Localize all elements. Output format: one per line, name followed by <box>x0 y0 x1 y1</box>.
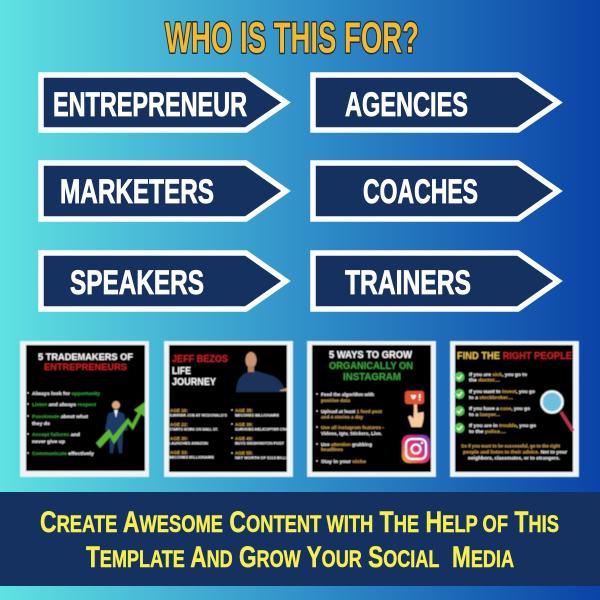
bullet list: Videos, Igtv, Stickers, Live. <box>321 431 382 436</box>
bullet list: Use all instagram features - <box>321 425 385 430</box>
closing paragraph: people and listen to their advice. Not to your <box>463 450 567 454</box>
timeline columns: AGE 39: <box>235 422 253 427</box>
panel heading <box>38 352 133 373</box>
panel heading: FIND THE RIGHT PEOPLE <box>457 351 572 362</box>
bullet list: Always look for opportunity <box>32 391 100 397</box>
arrow: agencies <box>313 75 558 130</box>
timeline columns: AGE 22: <box>170 422 188 427</box>
icon: notification bubble with tapping hand <box>405 391 424 427</box>
arrow: trainers: TRAINERS <box>345 264 471 302</box>
bullet list: Stay in your niche <box>321 459 367 464</box>
timeline columns: AGE 16: <box>170 408 188 413</box>
timeline columns: LAUNCHES AMAZON <box>169 442 208 446</box>
statements list: If you want to invest, you go <box>469 389 535 394</box>
bullet list: Passionate about what <box>32 414 88 420</box>
timeline columns: STARTS WORK ON WALL ST. <box>169 428 218 432</box>
portrait <box>236 352 287 392</box>
panel: find the right people <box>450 341 579 477</box>
timeline columns: AGE 33: <box>170 450 188 455</box>
statements list: to the police.... <box>469 429 506 434</box>
closing paragraph: neighbors, classmates, or to strangers. <box>468 456 560 460</box>
panel heading: INSTAGRAM <box>343 372 401 383</box>
statements list <box>469 372 536 434</box>
bullet list: Upload at least 1 feed post <box>321 409 383 414</box>
timeline columns <box>169 408 293 460</box>
closing paragraph: So if you want to be successful, go to the right <box>461 444 560 448</box>
bullet list: and 4 stories a day <box>321 414 364 420</box>
timeline columns: SUMMER JOB AT MCDONALD'S <box>169 414 228 418</box>
panel heading: JOURNEY <box>172 377 216 388</box>
bullet list: headlines <box>321 447 344 452</box>
bullet list: Use attention grabbing <box>321 442 372 447</box>
title: WHO IS THIS FOR? <box>165 14 419 62</box>
icon: magnifying glass <box>542 392 573 431</box>
panel heading: LIFE <box>172 366 191 377</box>
timeline columns: BECOMES BILLIONAIRE <box>235 414 280 418</box>
panel heading: ENTREPRENEURS <box>44 362 127 373</box>
panel: Jeff Bezos life journey <box>164 341 293 477</box>
bullet list <box>316 392 385 464</box>
banner text: CREATE AWESOME CONTENT WITH THE HELP OF THIS <box>40 506 559 539</box>
bullet list <box>27 391 100 457</box>
bullet list: Listen and always respect <box>32 402 96 408</box>
panel heading: 5 TRADEMAKERS OF <box>38 352 133 363</box>
arrow: entrepreneur: ENTREPRENEUR <box>53 86 247 124</box>
banner text <box>40 506 559 574</box>
icon: businessman <box>105 400 128 453</box>
timeline columns: AGE 35: <box>235 408 253 413</box>
bottom banner <box>0 492 600 586</box>
timeline columns: NET WORTH OF $113 BILLION <box>235 456 293 460</box>
arrow: marketers: MARKETERS <box>60 173 214 211</box>
closing paragraph <box>461 444 567 460</box>
timeline columns: BECOMES MILLIONAIRE <box>169 456 215 460</box>
panel heading: ORGANICALLY ON <box>329 361 413 372</box>
panel heading: 5 WAYS TO GROW <box>329 350 413 361</box>
arrow: marketers <box>41 163 286 219</box>
panel heading: JEFF BEZOS <box>172 354 228 365</box>
bullet list: never give up <box>32 439 65 445</box>
timeline columns: AGE 49: <box>235 436 253 441</box>
timeline columns: BUYS WASHINGTON POST <box>235 442 285 446</box>
timeline columns: AGE 30: <box>170 436 188 441</box>
bullet list: Feed the algorithm with <box>321 392 374 397</box>
statements list: the doctor.... <box>469 378 500 382</box>
arrow: coaches: COACHES <box>363 173 478 211</box>
check icons <box>454 372 464 433</box>
banner text: TEMPLATE AND GROW YOUR SOCIAL MEDIA <box>86 541 514 574</box>
statements list: If you are in trouble , you go <box>469 423 536 428</box>
statements list: If you have a case, you go <box>469 406 530 411</box>
bullet list: Accept failures and <box>32 432 80 438</box>
panel: 5 ways to grow on Instagram <box>307 341 436 477</box>
arrow: speakers <box>41 253 286 309</box>
timeline columns: AGE 55: <box>235 450 253 456</box>
icon: green growth arrow <box>96 402 145 448</box>
arrow: coaches <box>313 163 558 219</box>
arrow: entrepreneur <box>41 75 286 130</box>
panel heading <box>172 354 228 388</box>
bullet list: Communicate effectively <box>32 451 94 457</box>
statements list: to a stockbroker.... <box>469 395 513 400</box>
statements list: If you are sick, you go to <box>469 372 527 377</box>
arrow: speakers: SPEAKERS <box>70 264 204 302</box>
statements list: to a lawyer... <box>469 412 500 417</box>
icon: Instagram logo <box>402 435 430 463</box>
arrow: trainers <box>313 253 558 309</box>
arrow: agencies: AGENCIES <box>345 86 468 124</box>
bullet list: positive data <box>321 398 351 403</box>
panel: 5 trademakers of entrepreneurs <box>20 341 149 477</box>
panel heading <box>329 350 413 383</box>
bullet list: they do <box>32 421 50 427</box>
timeline columns: SURVIVES HELICOPTER CRASH <box>235 428 293 432</box>
